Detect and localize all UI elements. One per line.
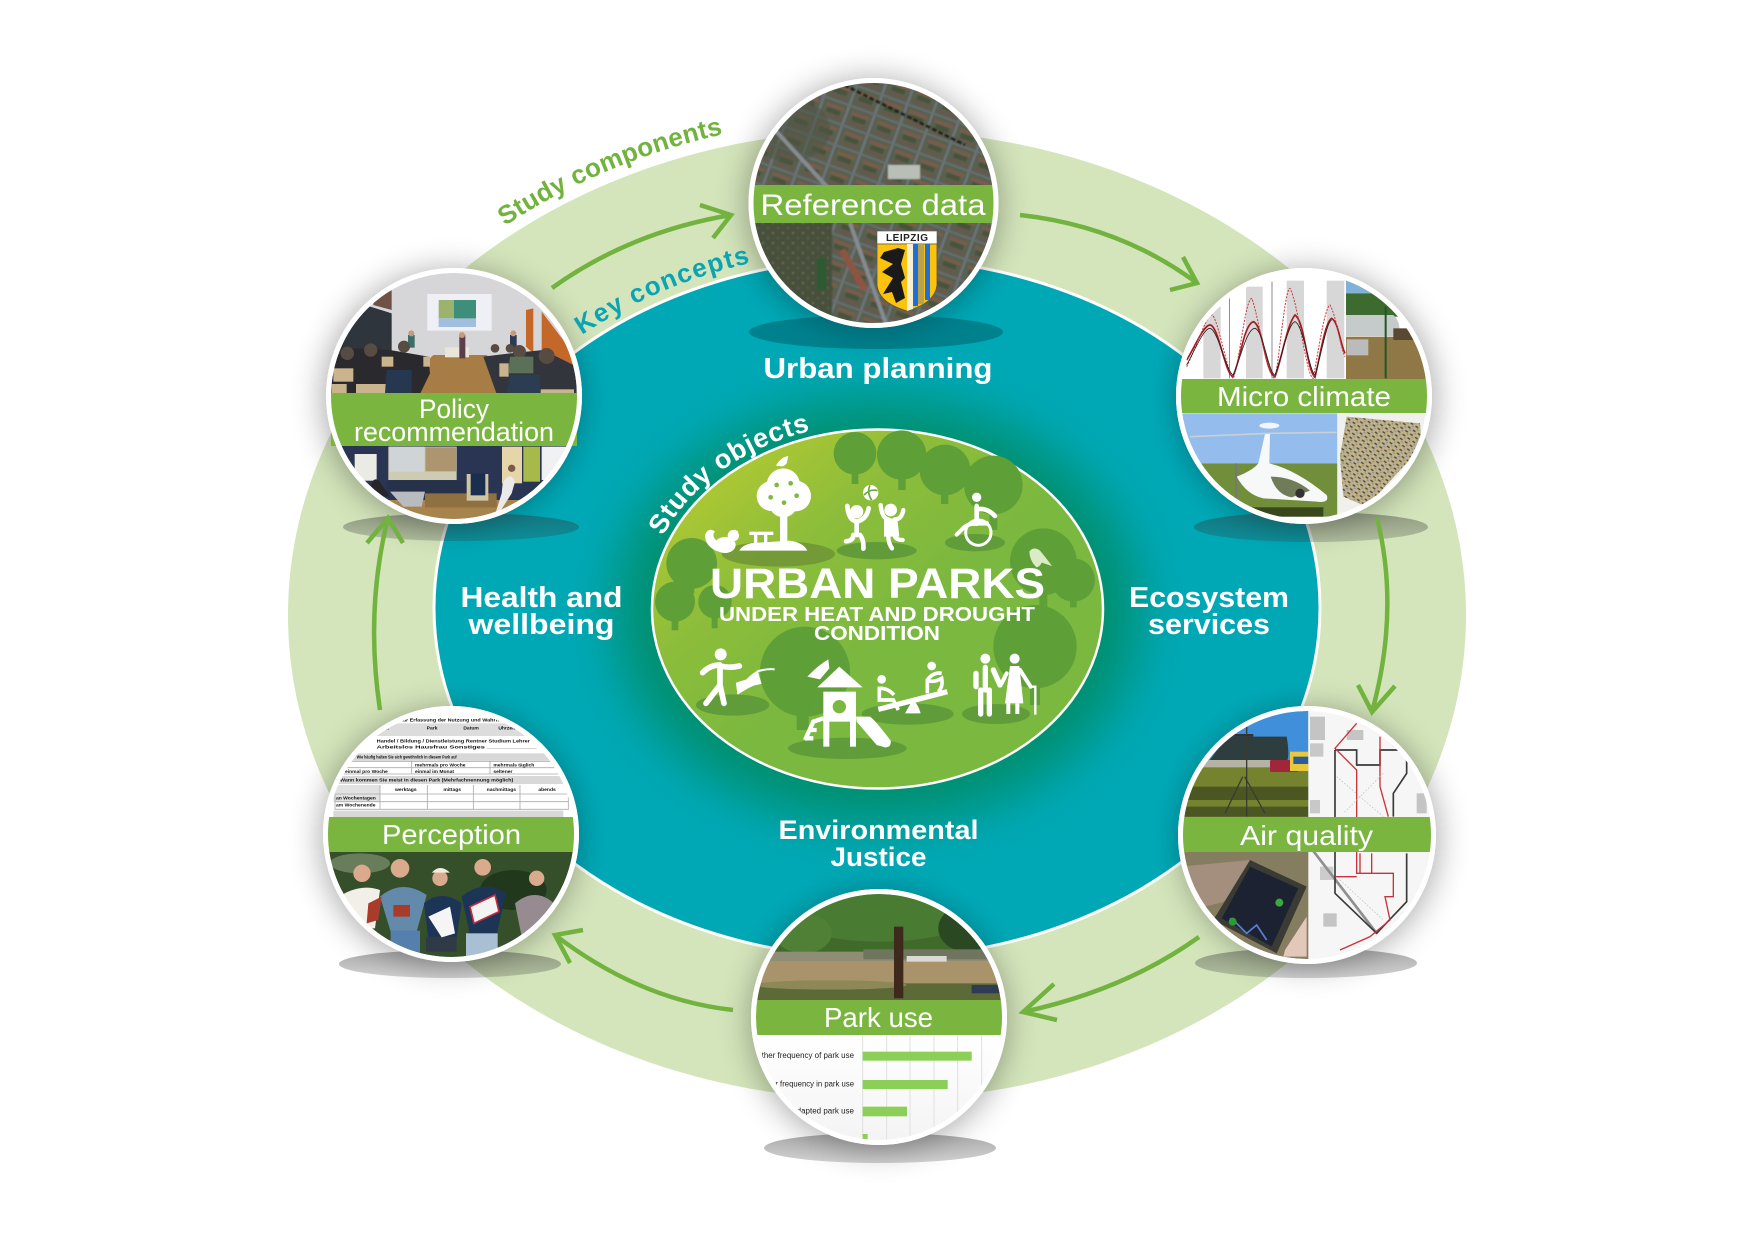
curved label: study components: Study components bbox=[498, 122, 722, 224]
photo: field sensor bbox=[1180, 708, 1308, 820]
photo: questionnaire form: Wie häufig halten Sie sich gewöhnlich in diesem Park auf bbox=[357, 755, 457, 761]
key concept: health and wellbeing: Health and bbox=[460, 582, 622, 614]
photo: questionnaire form: an Wochentagen bbox=[336, 795, 376, 801]
photo: questionnaire form: seltener bbox=[493, 769, 513, 775]
photo: thermal map bbox=[1337, 413, 1429, 520]
photo: questionnaire form: nachmittags bbox=[487, 787, 516, 793]
photo: questionnaire form: zur Erfassung der Nutzung und Wahrnehmung bbox=[400, 718, 520, 724]
panel: air quality bbox=[1178, 706, 1437, 965]
panel: reference data bbox=[745, 75, 1005, 335]
soft shadows behind photo circles bbox=[321, 79, 1438, 1150]
photo: questionnaire form: Wann kommen Sie meist in diesen Park (Mehrfachnennung möglich) bbox=[340, 778, 514, 784]
panel: policy recommendation bbox=[326, 268, 583, 527]
photo: questionnaire form bbox=[333, 718, 569, 817]
photo: questionnaire form: einmal im Monat bbox=[415, 769, 454, 775]
icon: fruit tree with bird and picnic table bbox=[739, 456, 811, 551]
icon: person playing with dog bbox=[703, 648, 775, 703]
title: urban parks: URBAN PARKS bbox=[710, 560, 1045, 608]
arrow: air quality to park use bbox=[1023, 937, 1199, 1020]
bar chart: park use: ther frequency of park use bbox=[762, 1051, 855, 1060]
label band bbox=[1183, 817, 1432, 852]
photo: questionnaire form: mehrmals pro Woche bbox=[415, 762, 466, 768]
photo: questionnaire form: Arbeitslos Hausfrau Sonstiges ____________ bbox=[377, 745, 537, 751]
ring: study components bbox=[288, 130, 1466, 1100]
arrow: perception to policy bbox=[367, 518, 403, 710]
label band bbox=[331, 393, 577, 446]
subtitle line 1: UNDER HEAT AND DROUGHT bbox=[719, 604, 1035, 626]
key concept: ecosystem services bbox=[1129, 582, 1289, 641]
photo: questionnaire form: Handel / Bildung / Dienstleistung Rentner Studium Lehrer bbox=[377, 739, 530, 745]
photo: park bbox=[757, 894, 1001, 1000]
icon: Leipzig coat of arms: LEIPZIG bbox=[886, 233, 928, 244]
arrow: policy to reference bbox=[552, 205, 731, 288]
label text: Perception bbox=[382, 819, 521, 850]
photo: study team bbox=[329, 852, 573, 957]
icon: playground with slide and bird bbox=[805, 659, 891, 747]
photo: questionnaire form: Datum bbox=[463, 725, 479, 731]
bar chart: park use: dapted park use bbox=[797, 1107, 855, 1116]
key concept: environmental justice: Justice bbox=[830, 842, 926, 872]
photo: questionnaire form: Park: bbox=[377, 725, 389, 731]
panel: park use bbox=[750, 885, 1010, 1148]
photo: questionnaire form: einmal pro Woche bbox=[345, 769, 388, 775]
icon: children with ball bbox=[846, 485, 903, 549]
teal shading around park bbox=[615, 400, 1139, 824]
photo: questionnaire form: werktags bbox=[394, 787, 417, 793]
label band bbox=[1181, 379, 1427, 413]
photo: questionnaire form: mehrmals täglich bbox=[493, 762, 534, 768]
icon: Leipzig coat of arms bbox=[877, 231, 937, 311]
icon: wheelchair user bbox=[957, 493, 995, 545]
photo: questionnaire form: Uhrzeit bbox=[498, 725, 516, 731]
arrow: reference to micro climate bbox=[1020, 215, 1197, 290]
label band bbox=[750, 185, 997, 223]
photo: temperature chart bbox=[1186, 280, 1346, 379]
key concept: environmental justice bbox=[778, 815, 978, 872]
curved label: study objects: Study objects bbox=[650, 418, 808, 534]
photo: questionnaire form: am Wochenende bbox=[336, 803, 376, 809]
label text: Park use bbox=[824, 1002, 933, 1033]
photo: measurement site bbox=[1346, 280, 1429, 379]
photo: questionnaire form: mittags bbox=[443, 787, 461, 793]
photo: questionnaire form: Park bbox=[427, 725, 438, 731]
label text: Air quality bbox=[1240, 820, 1373, 851]
photo: stakeholder workshop bbox=[330, 270, 583, 394]
label text bbox=[354, 394, 554, 447]
key concept: health and wellbeing bbox=[460, 582, 622, 641]
label band bbox=[755, 1000, 1003, 1035]
subtitle line 2: CONDITION bbox=[814, 623, 940, 645]
key concept: urban planning: Urban planning bbox=[764, 353, 992, 385]
panel: perception bbox=[323, 706, 579, 965]
panel: micro climate bbox=[1176, 267, 1432, 524]
key concept: environmental justice: Environmental bbox=[778, 815, 978, 845]
curved label: key concepts: Key concepts bbox=[574, 250, 748, 334]
panel: central urban parks ellipse bbox=[652, 430, 1103, 788]
icon: children on seesaw bbox=[877, 662, 947, 713]
icon: elderly couple bbox=[976, 654, 1035, 715]
ring: key concepts bbox=[434, 258, 1320, 958]
key concept: ecosystem services: services bbox=[1148, 609, 1270, 641]
photo: lecture room bbox=[342, 446, 566, 519]
icon: bird on tree bbox=[1029, 549, 1052, 567]
photo: questionnaire form: abends bbox=[538, 787, 556, 793]
photo: route map bbox=[1308, 708, 1437, 965]
bar chart: park use bbox=[762, 1035, 982, 1140]
label text: recommendation bbox=[354, 417, 554, 447]
label text: Micro climate bbox=[1217, 381, 1391, 412]
label band bbox=[328, 817, 574, 852]
label text: Policy bbox=[419, 394, 489, 424]
arrow: park use to perception bbox=[555, 930, 733, 1010]
trees in park bbox=[655, 430, 1095, 730]
key concept: ecosystem services: Ecosystem bbox=[1129, 582, 1289, 614]
bar chart: park use: r frequency in park use bbox=[775, 1079, 855, 1088]
photo: sensor phone bbox=[1180, 852, 1308, 962]
photo: gyrocopter bbox=[1177, 413, 1337, 517]
arrow: micro climate to air quality bbox=[1358, 518, 1395, 712]
icon: squirrel bbox=[705, 529, 739, 553]
ground shadows in park bbox=[696, 534, 1030, 759]
ground shadows under photo circles bbox=[339, 315, 1428, 1163]
label text: Reference data bbox=[760, 189, 986, 222]
key concept: health and wellbeing: wellbeing bbox=[467, 609, 614, 641]
